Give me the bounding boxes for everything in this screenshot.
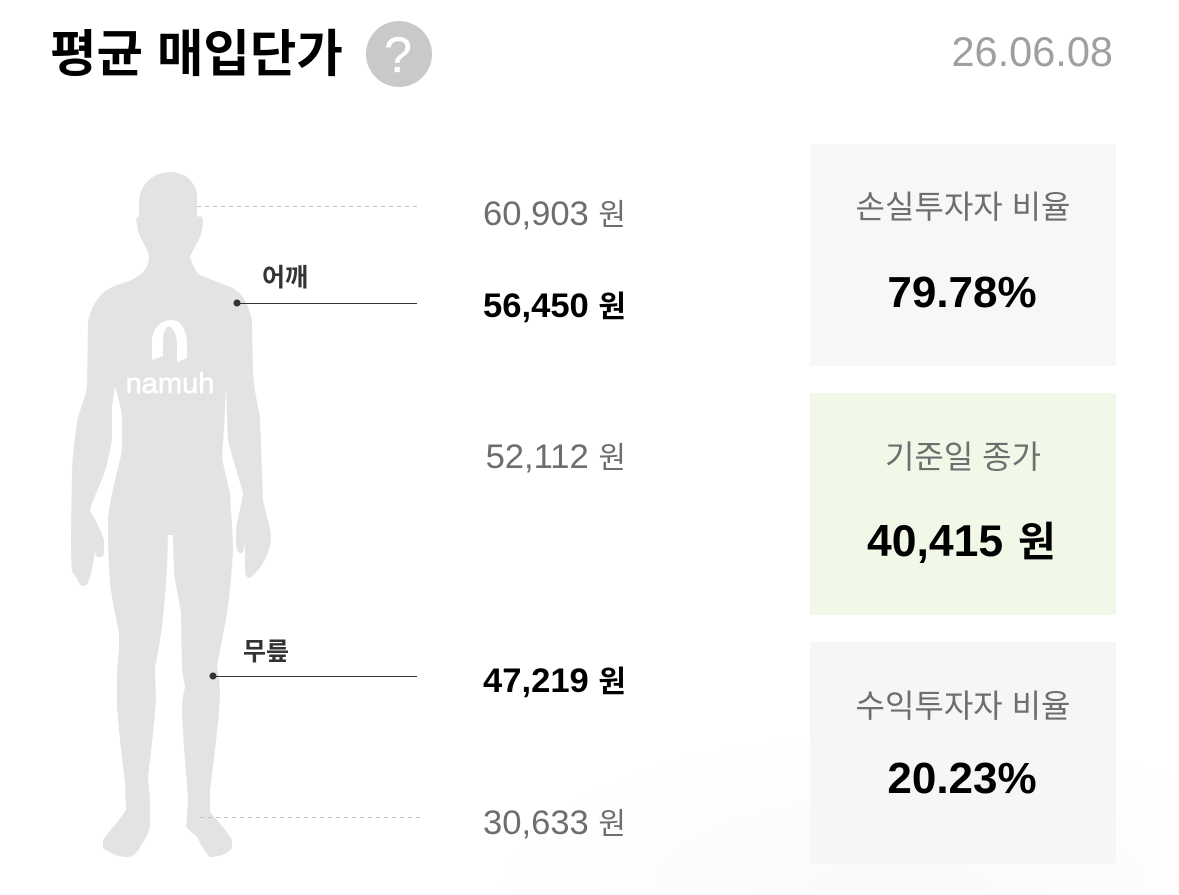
panel value: loss ratio: 79.78%	[887, 268, 1037, 317]
icon: help question mark	[366, 21, 432, 87]
icon: help question mark: ?	[384, 27, 412, 83]
logo: namuh	[126, 320, 214, 400]
price: knee 47,219: 47,219 원	[483, 662, 626, 700]
label: shoulder: 어깨	[262, 264, 308, 292]
shoulder marker	[234, 300, 417, 306]
panel value: profit ratio: 20.23%	[887, 754, 1037, 803]
panel heading: closing price: 기준일 종가	[885, 439, 1041, 475]
title: 평균 매입단가	[50, 26, 343, 82]
top guide line: 60,903	[197, 206, 417, 208]
knee marker	[210, 672, 417, 680]
label: knee: 무릎	[243, 638, 289, 666]
bottom guide line: 30,633	[200, 816, 420, 818]
date: 26.06.08	[951, 28, 1113, 75]
panel value: closing price: 원	[1018, 519, 1056, 565]
panel: loss investor ratio	[810, 144, 1116, 366]
panel heading: loss ratio: 손실투자자 비율	[856, 189, 1070, 225]
price: shoulder 56,450: 56,450 원	[483, 287, 626, 325]
panel: profit investor ratio	[810, 642, 1116, 864]
panel heading: profit ratio: 수익투자자 비율	[856, 688, 1070, 724]
price: 52,112: 52,112 원	[486, 438, 626, 476]
panel: base date closing price	[810, 393, 1116, 615]
price: bottom 30,633: 30,633 원	[483, 804, 626, 842]
price: top 60,903: 60,903 원	[483, 195, 626, 233]
panel value: closing price: 40,415	[867, 517, 1003, 566]
human silhouette figure	[71, 172, 271, 857]
logo: namuh: namuh	[126, 368, 214, 400]
